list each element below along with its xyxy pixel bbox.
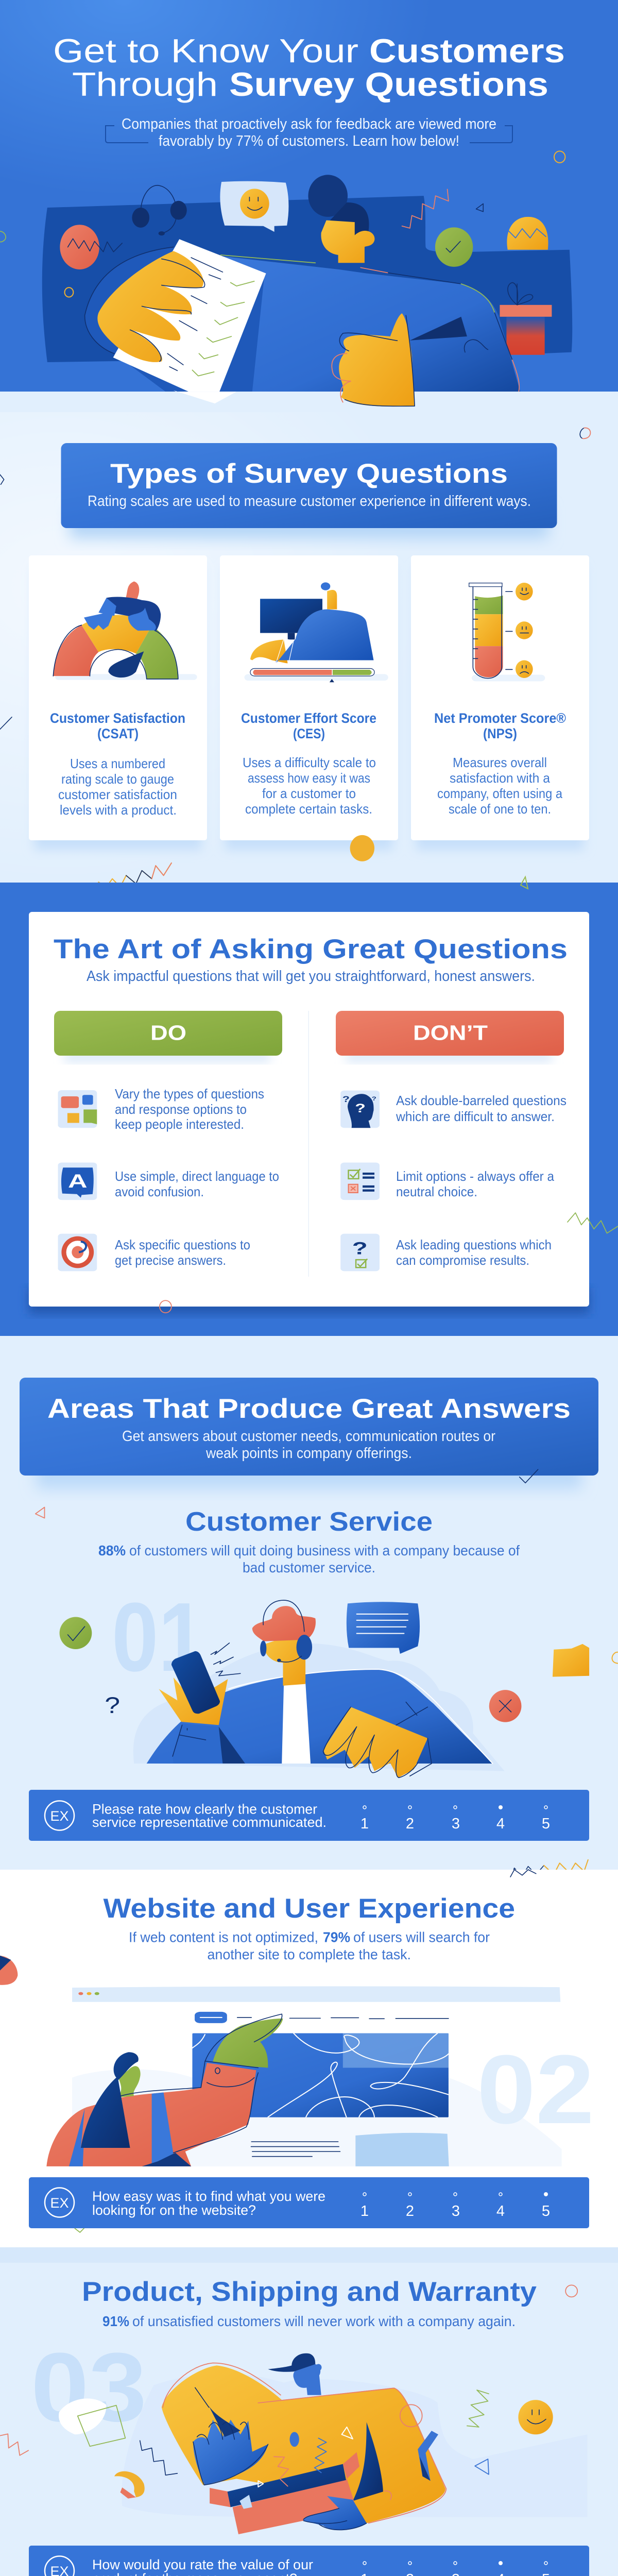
survey bar 2 [29,2177,589,2228]
card body: customer satisfaction [58,787,177,802]
icon: head with question: ? [342,1095,350,1104]
rating scale: 3 [452,2203,460,2219]
sleeve fold [410,317,467,341]
stat text: of unsatisfied customers will never work with a company again. [132,2313,516,2329]
card title [50,710,185,741]
stat text: 79% [323,1929,350,1945]
dont item 3 text: can compromise results. [396,1252,529,1268]
card body: company, often using a [437,786,562,801]
rating scale: 1 [360,2203,369,2219]
stat text [98,1543,520,1575]
EX badge [45,2556,74,2576]
rating scale [360,1805,550,1832]
fist with thumb [339,313,415,406]
card body: Measures overall [453,755,547,770]
card: CSAT [29,555,207,840]
card title: Customer Satisfaction [50,710,185,726]
character head [308,175,374,263]
dont item 1 text [396,1093,566,1124]
hero title: Survey Questions [229,65,548,103]
torso [222,256,520,392]
yellow body [162,2365,445,2523]
green square [78,2405,125,2446]
heading: Website and User Experience [103,1893,515,1924]
section: product, shipping and warranty [31,2277,537,2442]
question mark: ? [105,1692,120,1718]
question: How would you rate the value of our [92,2557,313,2572]
dark blue backdrop panel [42,196,572,362]
section: hero background [0,0,618,883]
do and dont icons [58,1090,618,1313]
ring decorations [0,151,565,297]
stat text: of customers will quit doing business with a company because of [129,1543,520,1558]
cuff [173,1723,245,1764]
background cloud [122,2374,587,2517]
text lines [251,2142,340,2157]
number 02: 02 [477,2035,594,2144]
rating scale: 2 [406,1816,414,1832]
icon: yellow ball [507,217,548,250]
nav pill and links [195,2012,449,2023]
hero image with squiggles [192,2033,449,2119]
panel: types of survey questions [61,443,557,538]
card body: assess how easy it was [248,770,370,786]
icon: head with question: ? [372,1095,376,1102]
hero foreground [0,151,565,406]
stat text: bad customer service. [243,1560,375,1575]
card body: complete certain tasks. [245,801,372,817]
do item 2 text: avoid confusion. [115,1184,204,1199]
icon: letter A bubble: A [68,1171,88,1192]
icon: head with question: ? [355,1101,366,1115]
person [46,2014,283,2166]
dark fold [353,2422,383,2501]
rating scale: 3 [452,1816,460,1832]
rating scale [360,2561,550,2576]
card: NPS [411,555,589,840]
icon: gift box [500,282,552,355]
EX badge [45,1801,74,1830]
hero subtitle with bracket: favorably by 77% of customers. Learn how below! [159,133,459,149]
card body: for a customer to [262,786,356,801]
upper hand [193,2420,268,2485]
subheading: weak points in company offerings. [205,1445,412,1462]
card title: Customer Effort Score [241,710,376,726]
icon: speech blocks [58,1090,97,1128]
hero title: Get to Know Your [53,32,358,70]
hand holding paper [97,251,203,362]
survey paper [113,239,266,403]
dont item 1 text: Ask double-barreled questions [396,1093,566,1108]
icon: yellow arc [114,2471,145,2499]
head with cap [268,2353,321,2395]
dont item 2 text: neutral choice. [396,1184,477,1199]
hero title: Through [72,65,218,103]
panel: the art of asking great questions [29,912,589,1307]
question [92,2189,325,2218]
hero subtitle with bracket [106,116,512,149]
DON'T header: DON’T [413,1021,488,1045]
EX badge [45,2188,74,2217]
hero illustration [42,175,572,406]
card body [437,755,562,817]
stat text: If web content is not optimized, [129,1929,318,1945]
card: CES [220,555,398,840]
question: Please rate how clearly the customer [92,1801,317,1817]
card illustrations and decorations [0,428,590,893]
DO header: DO [150,1021,186,1045]
icon: coral ball [60,225,122,269]
eye dot [289,2432,299,2447]
decorations [160,1213,618,1313]
icon: green check [60,1617,92,1649]
header shadow [36,1458,582,1489]
zigzag bridging sections [510,1870,536,1877]
card body: Uses a numbered [70,756,165,771]
heading: Areas That Produce Great Answers [47,1394,571,1424]
survey bar 1 [29,1790,589,1841]
dont item 3 text: Ask leading questions which [396,1237,552,1252]
stat text [129,1929,490,1962]
rating scale: 4 [496,1816,505,1832]
icon: headset [132,185,187,235]
rating scale: 2 [406,2203,414,2219]
strap [418,2431,438,2481]
decorations [0,1956,87,2232]
EX badge: EX [50,2195,69,2211]
do item 1 text: keep people interested. [115,1116,244,1132]
icon: coral x [489,1690,521,1722]
stat text: 91% [102,2313,129,2329]
hero subtitle with bracket: Companies that proactively ask for feedback are viewed more [122,116,496,132]
torso [147,1669,493,1764]
background cloud [133,1643,505,1771]
section: art of asking background [0,883,618,1870]
heading: Customer Service [185,1507,433,1537]
heading: Types of Survey Questions [110,459,508,489]
icon: head with question [340,1091,380,1128]
illustration: website and person [0,1956,562,2232]
hero title [53,32,565,103]
icon: question to checkbox [340,1234,380,1271]
card title [434,710,566,741]
card body: levels with a product. [60,802,177,818]
icon: checklist [340,1162,380,1200]
phone hand [159,1677,228,1725]
survey bar 3 [29,2546,589,2576]
arm sleeve [85,247,264,392]
lower hand [303,2496,367,2530]
subheading: Get answers about customer needs, communication routes or [122,1428,495,1445]
card body: Uses a difficulty scale to [243,755,376,770]
card title: Net Promoter Score® [434,710,566,726]
illustration: customer service agent [36,1469,617,1878]
subheading: Rating scales are used to measure customer experience in different ways. [88,493,531,510]
do item 1 text: and response options to [115,1101,247,1117]
hair [252,1606,316,1641]
question [92,1801,327,1830]
card title: (CSAT) [97,726,139,741]
rating scale [360,2192,550,2219]
decorations [36,1469,617,1878]
illustration: test tube and smileys [469,583,545,681]
icon: smiley [518,2400,553,2434]
icon: letter A bubble [58,1162,97,1200]
do item 2 text [115,1168,279,1199]
subheading [122,1428,495,1462]
shirt [282,1682,311,1764]
box [210,2452,359,2534]
fist outlines [339,315,415,406]
icon: green check ball [435,227,473,267]
icon: smiley speech bubble [220,181,288,232]
hero bottom strip [0,392,618,412]
card body: rating scale to gauge [61,771,174,787]
hero title: Customers [369,32,565,70]
DON'T header [336,1011,564,1056]
heading: The Art of Asking Great Questions [54,934,568,964]
dont item 2 text [396,1168,555,1199]
card title: (CES) [293,726,325,741]
do item 2 text: Use simple, direct language to [115,1168,279,1184]
icon: yellow bubble [553,1644,589,1677]
rating scale: 5 [542,2203,550,2219]
question: looking for on the website? [92,2202,256,2218]
section: customer service [98,1507,520,1692]
card body [58,756,177,818]
illustration: satisfaction gauge [53,581,197,680]
dont item 3 text [396,1237,552,1268]
content block [355,2133,449,2166]
decorations [0,2285,577,2500]
question: How easy was it to find what you were [92,2189,325,2204]
divider [308,1011,309,1277]
section: website and user experience [103,1893,515,1962]
DO header [54,1011,282,1056]
background shape [72,2069,562,2166]
card title [241,710,376,741]
header box [20,1378,598,1476]
card body [243,755,376,817]
card body: satisfaction with a [450,770,551,786]
number 03: 03 [31,2333,147,2442]
neck and face [263,1633,305,1686]
headset [260,1600,312,1662]
header shadow [70,507,548,538]
rating scale: 4 [496,2203,505,2219]
stat text: of users will search for [353,1929,490,1945]
white blob [59,2399,107,2434]
stat text: another site to complete the task. [207,1946,411,1962]
header box [61,443,557,528]
section: website background [0,1870,618,2247]
right hand and paper [323,1707,427,1777]
do item 3 text: get precise answers. [115,1252,226,1268]
dont item 2 text: Limit options - always offer a [396,1168,555,1184]
EX badge: EX [50,1808,69,1824]
illustration: delivery person [0,2285,587,2534]
browser bar [72,1986,560,2002]
decorations [0,428,590,893]
do item 1 text [115,1086,264,1132]
stat text: 88% [98,1543,126,1558]
illustration: effort score [244,582,388,682]
section: product background [0,2247,618,2576]
card body: scale of one to ten. [449,801,551,817]
panel: areas header [20,1378,598,1489]
rating scale: 5 [542,1816,550,1832]
card title: (NPS) [483,726,517,741]
phone [171,1651,220,1714]
question: service representative communicated. [92,1815,327,1830]
do item 1 text: Vary the types of questions [115,1086,264,1101]
heading: Product, Shipping and Warranty [82,2277,537,2307]
paper overlap [174,391,236,403]
phone signal lines [211,1643,241,1676]
number 01: 01 [112,1583,205,1692]
card shadows [34,567,584,850]
do item 3 text: Ask specific questions to [115,1237,250,1252]
do item 3 text [115,1237,250,1268]
subheading: Ask impactful questions that will get you straightforward, honest answers. [87,968,535,985]
shadows under buttons [64,1051,552,1062]
rating scale: 1 [360,1816,369,1832]
dont item 1 text: which are difficult to answer. [396,1109,555,1124]
speech bubble [347,1602,420,1654]
triangle decoration [521,877,528,889]
icon: target [58,1234,97,1271]
icon: question to checkbox: ? [352,1238,368,1258]
